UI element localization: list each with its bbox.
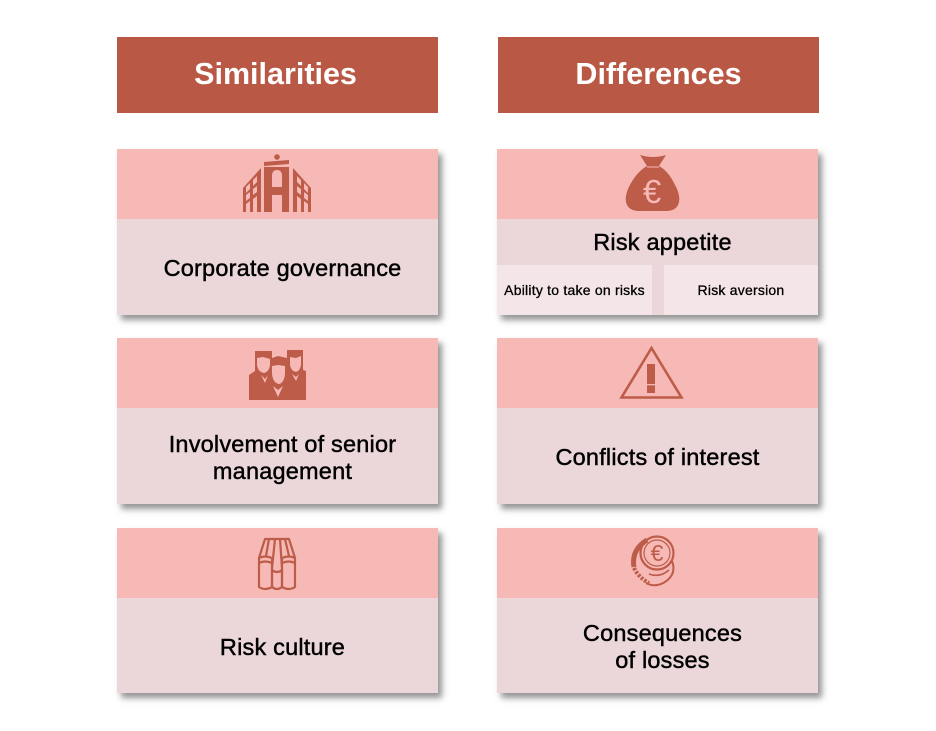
label: involvement of senior management: management <box>213 458 352 484</box>
sub-panel: risk aversion: Risk aversion <box>698 282 784 298</box>
label: risk appetite: Risk appetite <box>593 229 732 255</box>
panel: risk culture <box>117 528 438 693</box>
panel: risk appetite <box>497 149 818 315</box>
label: conflicts of interest: Conflicts of interest <box>555 444 760 470</box>
icon band: coins <box>497 528 818 598</box>
heading: Similarities: Similarities <box>194 57 357 91</box>
label: risk culture: Risk culture <box>220 634 345 660</box>
label: corporate governance: Corporate governance <box>164 255 401 281</box>
label: involvement of senior management <box>169 431 396 484</box>
icon: euro sign: € <box>651 540 664 566</box>
label: involvement of senior management: Involvement of senior <box>169 431 396 457</box>
panel: corporate governance <box>117 149 438 315</box>
panel: consequences of losses <box>497 528 818 693</box>
sub-panel: ability to take on risks: Ability to take on risks <box>504 282 645 298</box>
heading: Differences: Differences <box>575 57 742 91</box>
label: consequences of losses <box>583 620 742 673</box>
panel: conflicts of interest <box>497 338 818 504</box>
sub-panel: ability to take on risks <box>497 265 652 315</box>
heading: Similarities <box>117 37 438 113</box>
panel: involvement of senior management <box>117 338 438 504</box>
sub-panel: risk aversion <box>664 265 818 315</box>
icon band: people <box>117 338 438 408</box>
icon band: warning triangle <box>497 338 818 408</box>
label: consequences of losses: Consequences <box>583 620 742 646</box>
icon band: money bag <box>497 149 818 219</box>
label: consequences of losses: of losses <box>615 647 710 673</box>
icon band: books <box>117 528 438 598</box>
icon band: building <box>117 149 438 219</box>
icon: euro sign: € <box>643 173 661 210</box>
heading: Differences <box>498 37 819 113</box>
